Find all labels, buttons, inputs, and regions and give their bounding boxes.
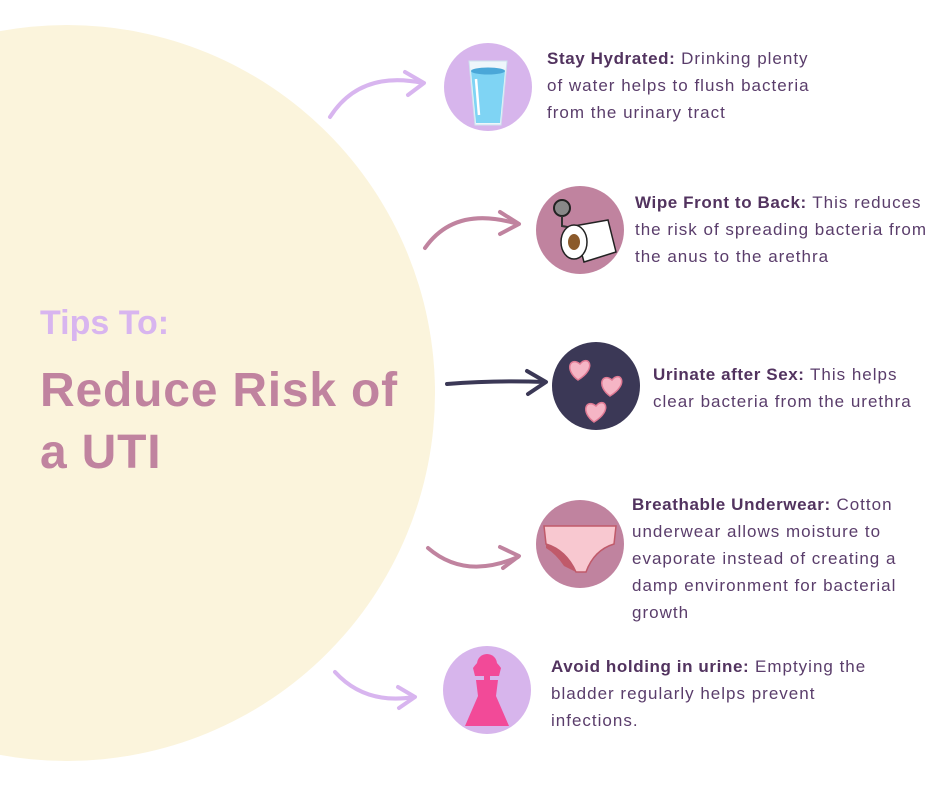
- icon: hearts: [552, 342, 640, 430]
- icon: water glass: [444, 43, 532, 131]
- title: Reduce Risk of: [40, 364, 398, 417]
- text: breathable underwear: underwear allows moisture to: [632, 522, 881, 541]
- text: urinate after sex: clear bacteria from the urethra: [653, 392, 912, 411]
- text: wipe front to back: the risk of spreading bacteria from: [635, 220, 927, 239]
- text: stay hydrated: of water helps to flush bacteria: [547, 76, 810, 95]
- icon: underwear: [536, 500, 624, 588]
- text: stay hydrated: Stay Hydrated: Drinking plenty: [547, 49, 809, 68]
- arrow 4: [428, 547, 519, 568]
- arrow 1: [330, 72, 424, 117]
- text: breathable underwear: growth: [632, 603, 689, 622]
- text: avoid holding urine: bladder regularly helps prevent: [551, 684, 815, 703]
- text: breathable underwear: evaporate instead of creating a: [632, 549, 896, 568]
- heading: tips to: Tips To:: [40, 304, 169, 342]
- title: [40, 364, 398, 479]
- text: breathable underwear: [632, 495, 896, 622]
- text: stay hydrated: from the urinary tract: [547, 103, 726, 122]
- text: breathable underwear: Breathable Underwear: Cotton: [632, 495, 893, 514]
- text: urinate after sex: [653, 365, 912, 411]
- text: wipe front to back: the anus to the arethra: [635, 247, 829, 266]
- title: a UTI: [40, 426, 161, 479]
- text: urinate after sex: Urinate after Sex: This helps: [653, 365, 897, 384]
- text: wipe front to back: [635, 193, 927, 266]
- background circle: [0, 25, 435, 761]
- text: stay hydrated: [547, 49, 810, 122]
- arrow 5: [335, 672, 415, 708]
- text: avoid holding urine: infections.: [551, 711, 639, 730]
- text: wipe front to back: Wipe Front to Back: This reduces: [635, 193, 922, 212]
- icon: woman: [443, 646, 531, 734]
- text: breathable underwear: damp environment for bacterial: [632, 576, 896, 595]
- arrow 2: [425, 212, 519, 248]
- text: avoid holding urine: Avoid holding in urine: Emptying the: [551, 657, 866, 676]
- text: avoid holding urine: [551, 657, 866, 730]
- icon: toilet paper: [536, 186, 624, 274]
- arrow 3: [447, 371, 546, 394]
